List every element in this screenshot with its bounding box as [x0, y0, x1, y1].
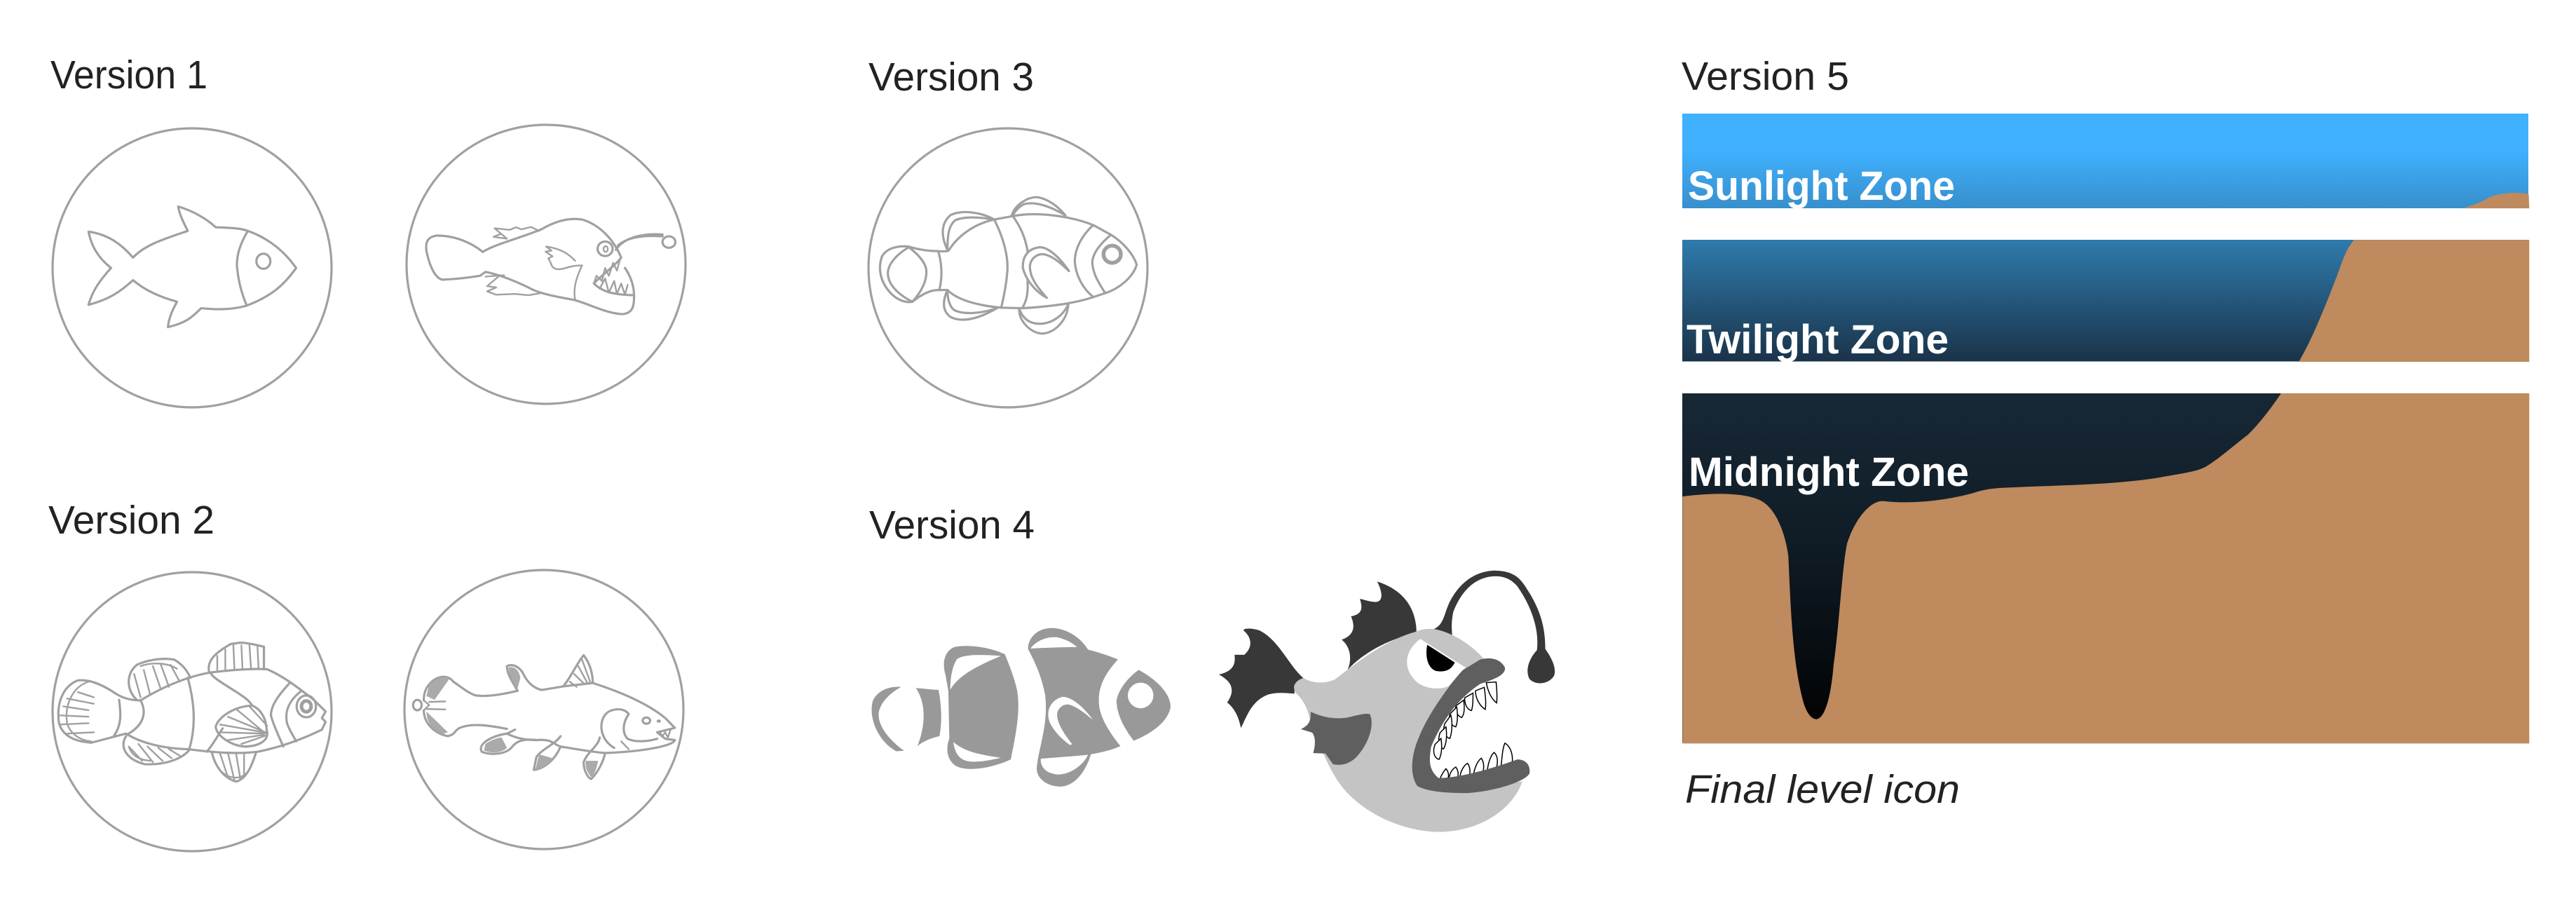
jaw — [1412, 658, 1529, 793]
circle icon: simplified clownfish — [868, 128, 1147, 407]
caption: Final level icon: Final level icon — [1685, 767, 1960, 812]
seabed — [2298, 240, 2529, 362]
tail fin — [1219, 629, 1303, 728]
clownfish line art — [58, 643, 326, 782]
circle icon: simple fish — [53, 128, 332, 407]
heading: Version 1: Version 1 — [50, 53, 207, 97]
teeth — [1433, 682, 1513, 779]
eye — [1407, 639, 1466, 689]
zone label: Sunlight Zone — [1688, 163, 1955, 209]
seabed with trench — [1682, 393, 2529, 743]
zone label: Midnight Zone — [1689, 449, 1969, 495]
panel: Twilight Zone — [1682, 240, 2529, 362]
body — [1294, 629, 1522, 832]
seabed — [2463, 193, 2529, 208]
heading: Version 3: Version 3 — [868, 55, 1034, 100]
clownfish outline — [880, 197, 1137, 334]
icon: grey filled clownfish — [872, 628, 1171, 787]
panel: Midnight Zone — [1682, 393, 2529, 743]
panel: Sunlight Zone — [1682, 114, 2529, 209]
lure — [1433, 571, 1555, 684]
pectoral fin — [1301, 712, 1372, 765]
icon: grey filled anglerfish — [1219, 571, 1555, 832]
coelacanth line art — [413, 656, 675, 779]
circle icon: coelacanth — [404, 570, 683, 849]
heading: Version 2: Version 2 — [48, 498, 214, 543]
anglerfish outline — [426, 219, 676, 314]
dorsal fin — [1342, 581, 1417, 670]
circle icon: outlined anglerfish — [407, 125, 686, 404]
heading: Version 5: Version 5 — [1682, 54, 1849, 99]
heading: Version 4: Version 4 — [869, 503, 1035, 548]
zone label: Twilight Zone — [1686, 317, 1949, 362]
fish outline — [88, 207, 296, 327]
circle icon: detailed clownfish — [53, 572, 332, 851]
